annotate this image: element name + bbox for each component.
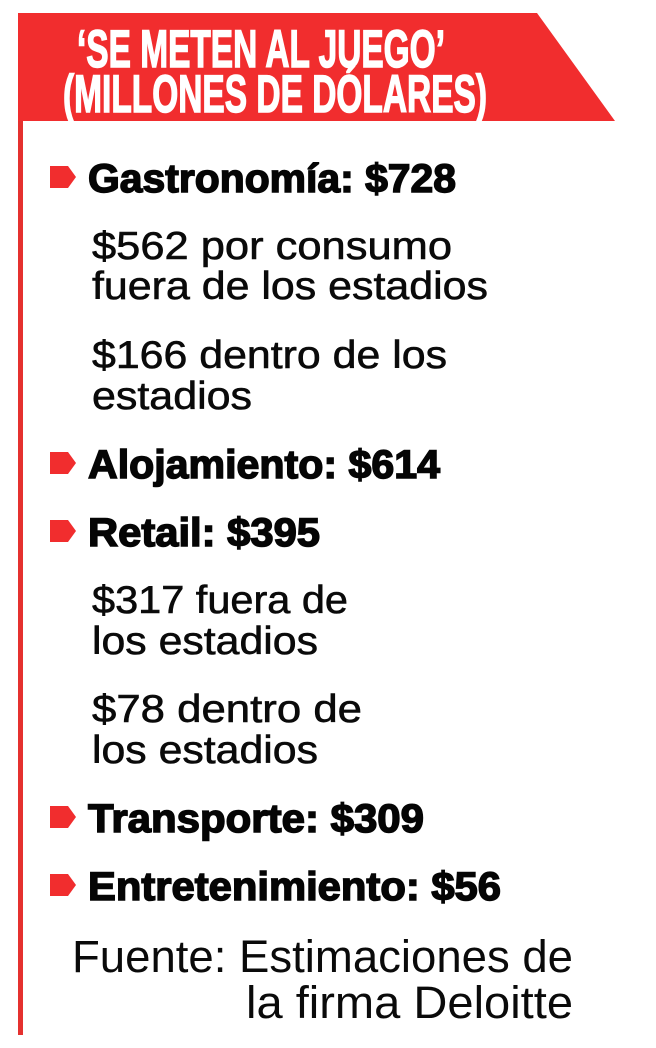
left vertical rule	[18, 13, 23, 1035]
icon: bullet	[50, 166, 76, 188]
item: Retail	[50, 511, 362, 772]
title: ‘SE METEN AL JUEGO’	[77, 20, 445, 79]
detail: consumo fuera: fuera de los estadios	[92, 265, 488, 308]
source note: Fuente: Estimaciones de	[72, 931, 573, 982]
detail: dentro: $78 dentro de	[92, 688, 362, 731]
detail: dentro: estadios	[92, 375, 252, 418]
heading: Transporte: Transporte: $309	[88, 797, 424, 841]
source note: la firma Deloitte	[246, 977, 573, 1028]
item: Entretenimiento	[50, 865, 501, 909]
detail: consumo fuera	[92, 225, 488, 308]
detail: dentro: $166 dentro de los	[92, 334, 447, 377]
item: Alojamiento	[50, 443, 441, 487]
heading: Retail: Retail: $395	[88, 511, 320, 555]
title	[63, 20, 487, 124]
icon: bullet	[50, 874, 76, 896]
detail: dentro	[92, 688, 362, 772]
icon: bullet	[50, 806, 76, 828]
detail: fuera	[92, 579, 348, 663]
item: Transporte	[50, 797, 424, 841]
detail: fuera: $317 fuera de	[92, 579, 348, 622]
source note	[72, 931, 573, 1028]
icon: bullet	[50, 520, 76, 542]
detail: consumo fuera: $562 por consumo	[92, 225, 452, 268]
detail: dentro	[92, 334, 447, 418]
heading: Gastronomía: Gastronomía: $728	[88, 157, 456, 201]
heading: Alojamiento: Alojamiento: $614	[88, 443, 441, 487]
detail: dentro: los estadios	[92, 729, 318, 772]
header banner	[18, 13, 615, 124]
item: Gastronomía	[50, 157, 488, 418]
heading: Entretenimiento: Entretenimiento: $56	[88, 865, 501, 909]
detail: fuera: los estadios	[92, 620, 318, 663]
icon: bullet	[50, 452, 76, 474]
